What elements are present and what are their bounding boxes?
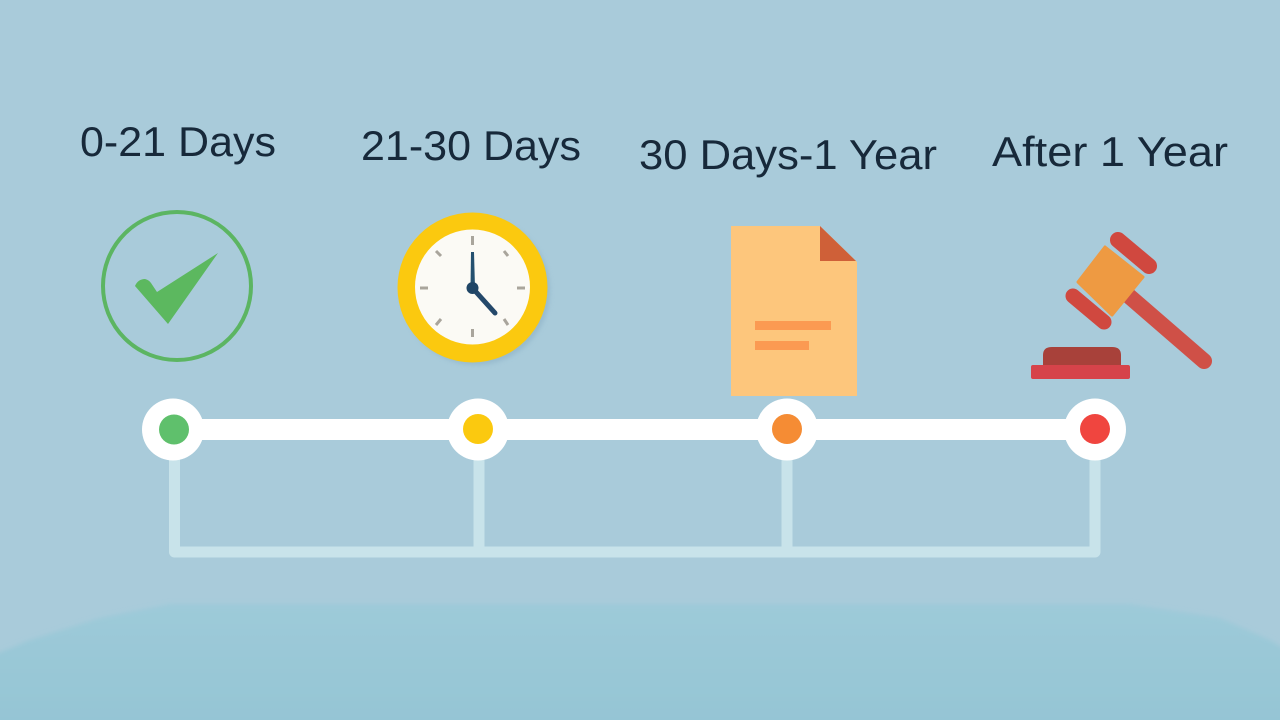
icon: green check circle [103,212,251,360]
node: red [1064,398,1126,460]
label: 0-21 Days: 0-21 Days [80,118,276,165]
icon: yellow clock [398,212,550,365]
node: yellow [447,398,509,460]
icon: gavel [1031,240,1204,379]
timeline connector bracket [174,450,1095,552]
node: orange [756,398,818,460]
node: green [142,398,204,460]
floor band [0,604,1280,720]
timeline bar [173,419,1095,440]
label: 21-30 Days: 21-30 Days [361,122,581,169]
label: After 1 Year: After 1 Year [992,128,1228,175]
label: 30 Days-1 Year: 30 Days-1 Year [639,131,937,178]
icon: document [731,226,857,396]
